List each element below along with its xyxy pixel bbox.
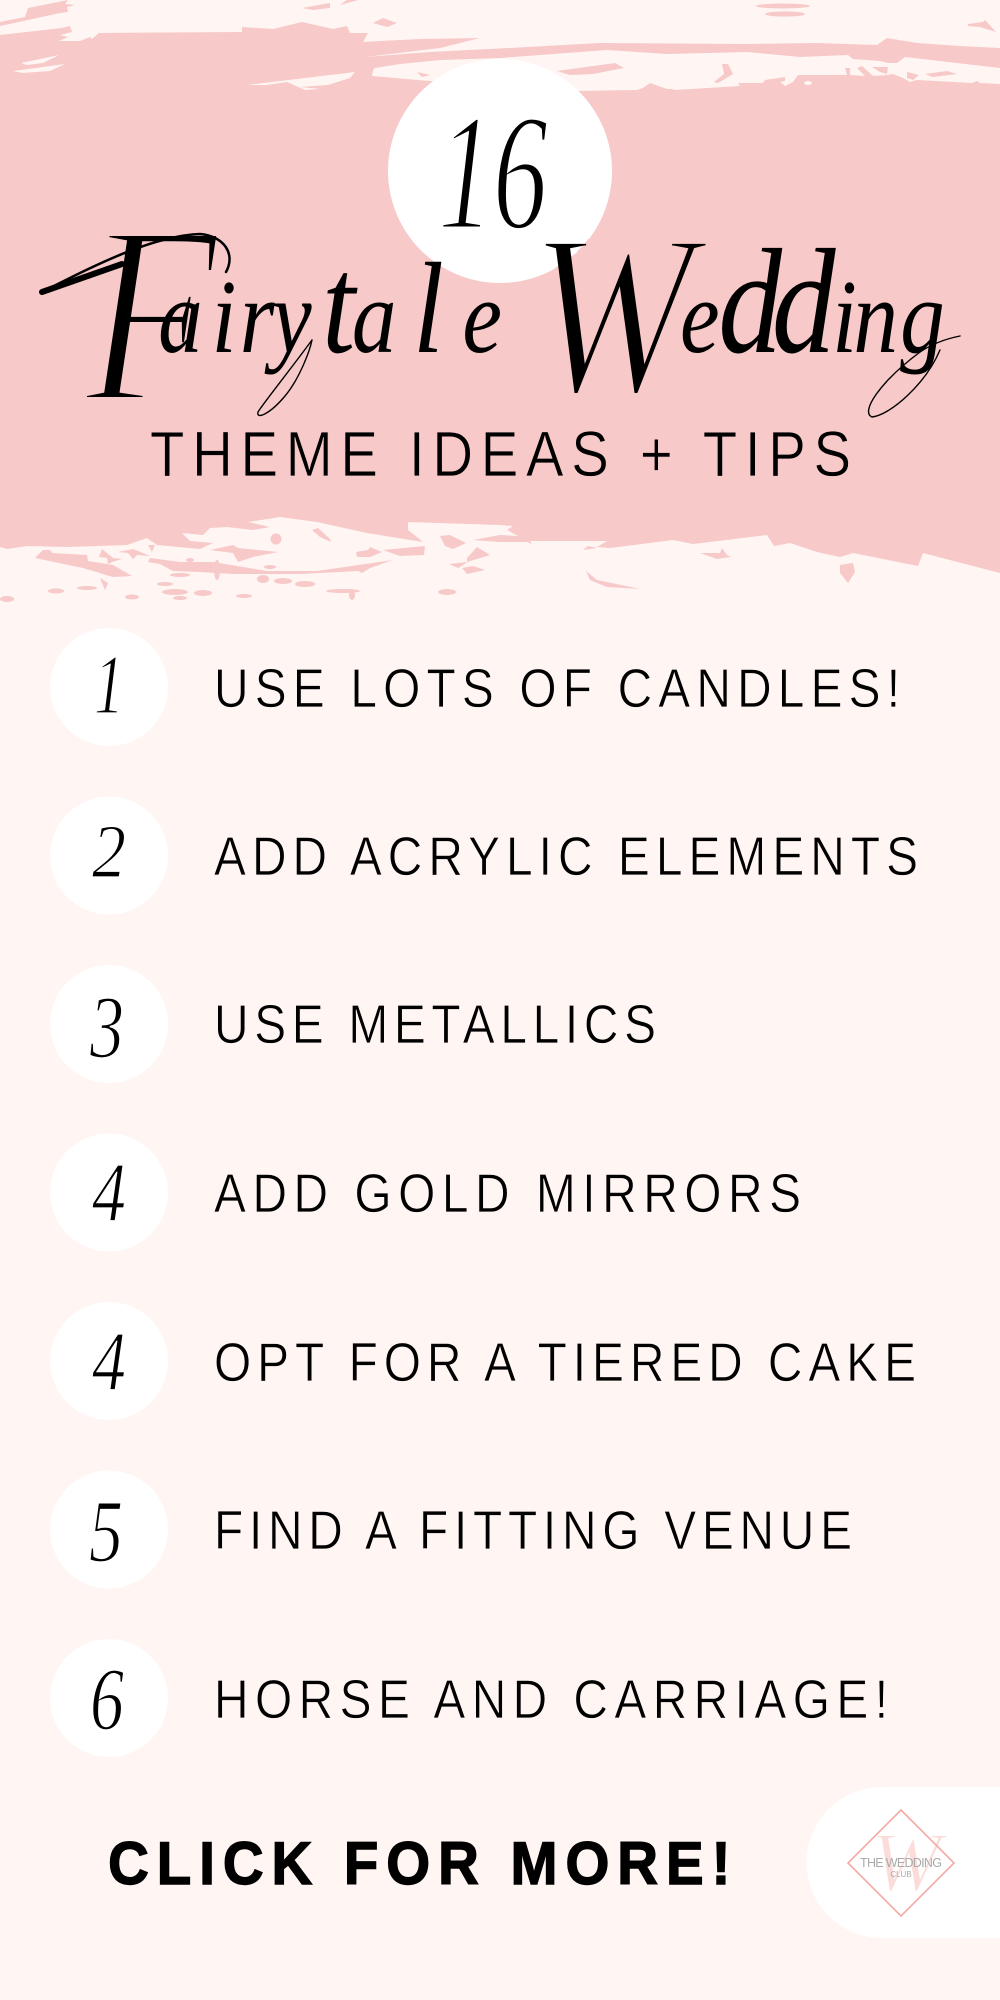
title: Fairytale Wedding: d (772, 219, 836, 385)
number badge (50, 796, 168, 914)
logo sub name: CLUB (890, 1870, 912, 1879)
tip 6 (50, 1470, 852, 1588)
number badge (50, 1470, 168, 1588)
title: Fairytale Wedding: F (83, 174, 220, 456)
title: Fairytale Wedding: a (158, 259, 203, 376)
title: Fairytale Wedding: i (212, 259, 236, 376)
title: Fairytale Wedding: a (352, 259, 397, 376)
title: Fairytale Wedding: l (413, 237, 444, 381)
tip 3 (50, 965, 656, 1083)
title: Fairytale Wedding: W (530, 188, 708, 443)
number: 4 (92, 1145, 126, 1240)
title: Fairytale Wedding: g (900, 259, 945, 376)
number: 5 (89, 1482, 123, 1581)
number: 1 (94, 638, 124, 732)
number badge (50, 1134, 168, 1252)
subtitle: THEME IDEAS + TIPS (150, 418, 851, 490)
call to action: CLICK FOR MORE! (108, 1830, 730, 1897)
title: Fairytale Wedding: n (853, 259, 898, 376)
logo diamond (848, 1810, 954, 1916)
white pill (806, 1787, 1000, 1938)
number: 6 (90, 1650, 124, 1749)
tip 5 (50, 1302, 916, 1420)
tip 7 (50, 1639, 888, 1757)
cream flecks in brush stroke (13, 55, 812, 90)
title: Fairytale Wedding: e (680, 259, 720, 376)
big number 16: 16 (438, 82, 548, 265)
number badge (50, 628, 168, 746)
number badge (50, 1302, 168, 1420)
white circle behind number (388, 59, 612, 283)
tip 4 (50, 1134, 801, 1252)
tip text: ADD ACRYLIC ELEMENTS (214, 825, 918, 887)
title: Fairytale Wedding: e (462, 259, 502, 376)
logo name: THE WEDDING (860, 1856, 942, 1870)
title: Fairytale Wedding: y (264, 259, 312, 376)
panel: pink brush-stroke header (0, 0, 1000, 602)
tip text: ADD GOLD MIRRORS (214, 1162, 801, 1224)
title: Fairytale Wedding: r (240, 259, 275, 376)
tip text: USE LOTS OF CANDLES! (214, 657, 900, 719)
number: 2 (92, 809, 126, 894)
tip text: USE METALLICS (214, 993, 656, 1055)
title: Fairytale Wedding: i (832, 259, 857, 376)
logo script W: W (871, 1816, 948, 1909)
tip 1 (50, 628, 900, 746)
tip text: HORSE AND CARRIAGE! (214, 1668, 888, 1730)
number: 4 (92, 1314, 126, 1409)
tip text: FIND A FITTING VENUE (214, 1499, 852, 1561)
tip 2 (50, 796, 918, 914)
title: Fairytale Wedding: t (322, 228, 358, 383)
decorative script flourishes (42, 234, 960, 417)
number: 3 (89, 978, 124, 1077)
tip text: OPT FOR A TIERED CAKE (214, 1331, 916, 1393)
logo panel (806, 1787, 1000, 1938)
title: Fairytale Wedding: d (718, 219, 782, 385)
number badge (50, 965, 168, 1083)
number badge (50, 1639, 168, 1757)
